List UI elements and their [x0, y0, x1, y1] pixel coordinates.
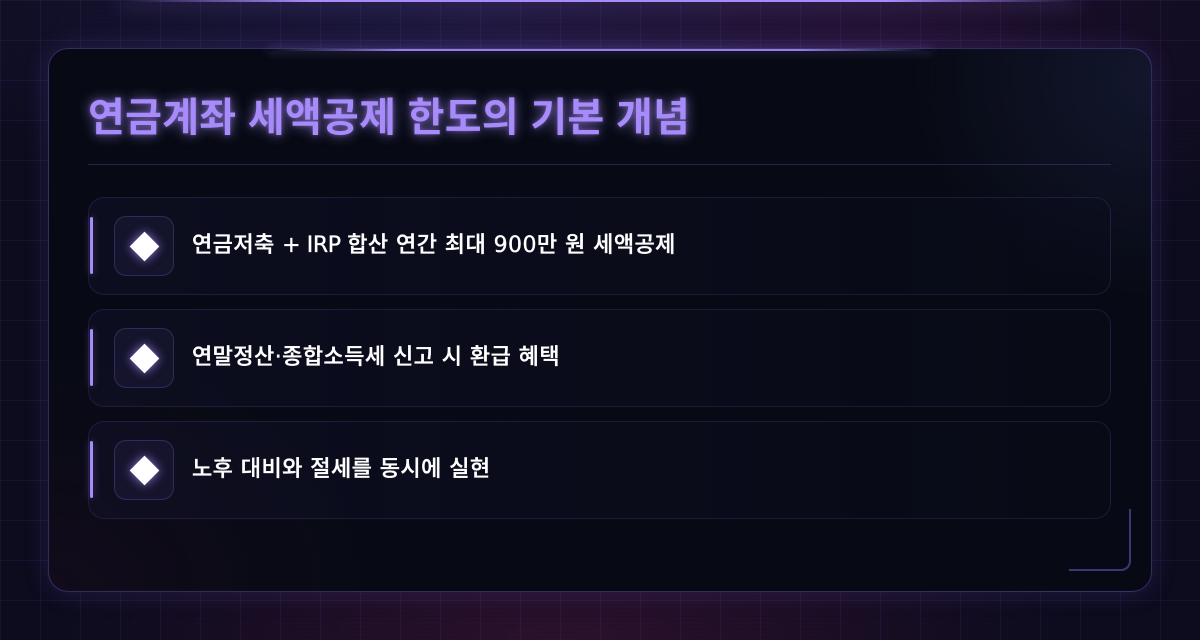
item 2 text: 연말정산·종합소득세 신고 시 환급 혜택: [192, 345, 560, 370]
panel: item 1: [88, 197, 1111, 295]
item 1 text: 연금저축 + IRP 합산 연간 최대 900만 원 세액공제: [192, 233, 676, 258]
icon: diamond 3: [114, 440, 174, 500]
accent bar 2: [90, 329, 93, 386]
title divider: [88, 164, 1111, 165]
panel: item 2: [88, 309, 1111, 407]
title: 연금계좌 세액공제 한도의 기본 개념: [88, 96, 690, 140]
corner bracket: [1069, 509, 1131, 571]
accent bar 3: [90, 441, 93, 498]
panel: item 3: [88, 421, 1111, 519]
top glow bar: [120, 0, 1080, 2]
card top glow line: [268, 49, 932, 51]
icon: diamond 2: [114, 328, 174, 388]
item 3 text: 노후 대비와 절세를 동시에 실현: [192, 457, 491, 482]
accent bar 1: [90, 217, 93, 274]
panel: main card: [48, 48, 1152, 592]
icon: diamond 1: [114, 216, 174, 276]
